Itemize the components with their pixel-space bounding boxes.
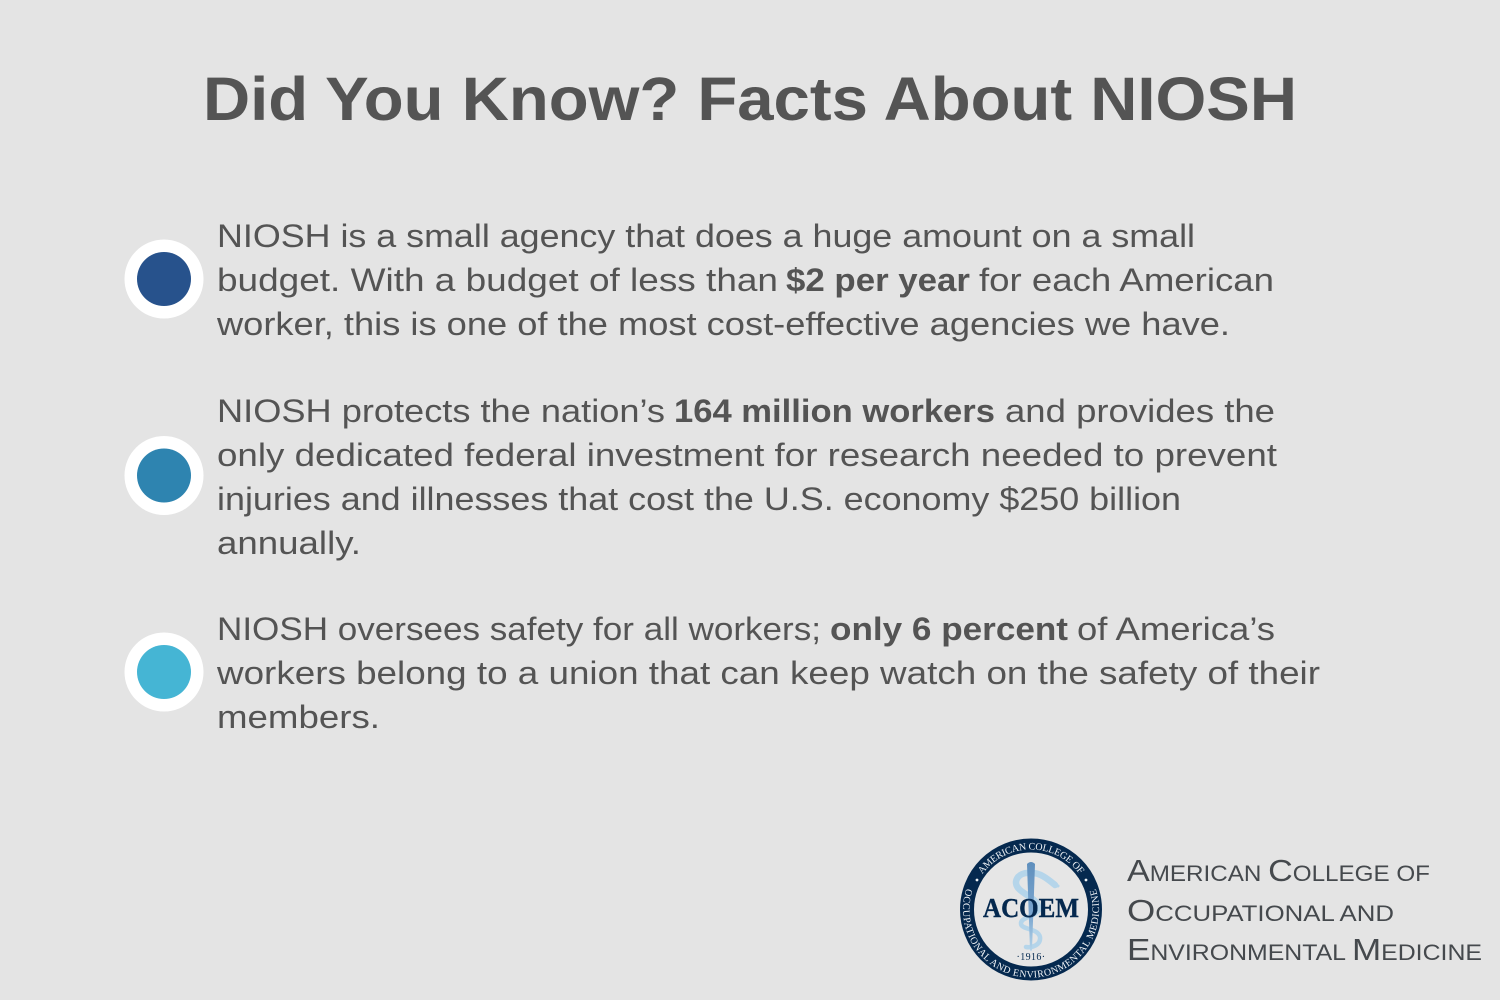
text: workers fact: and provides the bbox=[1005, 393, 1275, 429]
fact 1 bbox=[124, 218, 1274, 342]
text: budget fact: NIOSH is a small agency that does a huge amount on a small bbox=[217, 218, 1195, 254]
seal: year: ·1916· bbox=[1016, 952, 1046, 963]
organization name: ENVIRONMENTAL MEDICINE bbox=[1127, 932, 1482, 967]
seal: snake bbox=[1016, 873, 1058, 947]
text: union fact: members. bbox=[217, 699, 380, 735]
text: union fact: only 6 percent bbox=[830, 611, 1068, 647]
text: budget fact bbox=[216, 218, 1274, 342]
organization name: OCCUPATIONAL AND bbox=[1127, 893, 1394, 928]
icon: medium blue bullet bbox=[124, 436, 204, 515]
text: union fact: of America’s bbox=[1077, 611, 1275, 647]
icon: light blue bullet bbox=[124, 632, 204, 712]
text: union fact: workers belong to a union that can keep watch on the safety of their bbox=[216, 655, 1320, 691]
organization name: AMERICAN COLLEGE OF bbox=[1127, 853, 1430, 888]
seal: ACOEM wordmark: ACOEM bbox=[983, 893, 1079, 923]
seal: upper ring text: AMERICAN COLLEGE OF bbox=[979, 842, 1084, 874]
text: workers fact: only dedicated federal investment for research needed to prevent bbox=[217, 437, 1277, 473]
icon: dark blue bullet bbox=[124, 240, 204, 318]
text: workers fact: annually. bbox=[217, 525, 361, 561]
fact 2 bbox=[124, 393, 1277, 561]
text: workers fact bbox=[217, 393, 1277, 561]
organization name bbox=[1127, 853, 1482, 967]
text: budget fact: $2 per year bbox=[786, 262, 970, 298]
text: budget fact: for each American bbox=[979, 262, 1274, 298]
text: budget fact: worker, this is one of the most cost-effective agencies we have. bbox=[216, 306, 1230, 342]
seal: lower ring text: OCCUPATIONAL AND ENVIRONMENTAL MEDICINE bbox=[962, 889, 1100, 978]
text: union fact: NIOSH oversees safety for all workers; bbox=[217, 611, 821, 647]
title: Did You Know? Facts About NIOSH bbox=[203, 65, 1297, 133]
seal: staff bbox=[1027, 862, 1035, 951]
text: union fact bbox=[216, 611, 1320, 735]
fact 3 bbox=[124, 611, 1320, 735]
text: workers fact: injuries and illnesses that cost the U.S. economy $250 billion bbox=[217, 481, 1181, 517]
logo: ACOEM seal bbox=[960, 838, 1102, 980]
text: workers fact: NIOSH protects the nation’s bbox=[217, 393, 665, 429]
text: workers fact: 164 million workers bbox=[674, 393, 995, 429]
text: budget fact: budget. With a budget of less than bbox=[217, 262, 778, 298]
seal: ring dots bbox=[976, 879, 1087, 881]
